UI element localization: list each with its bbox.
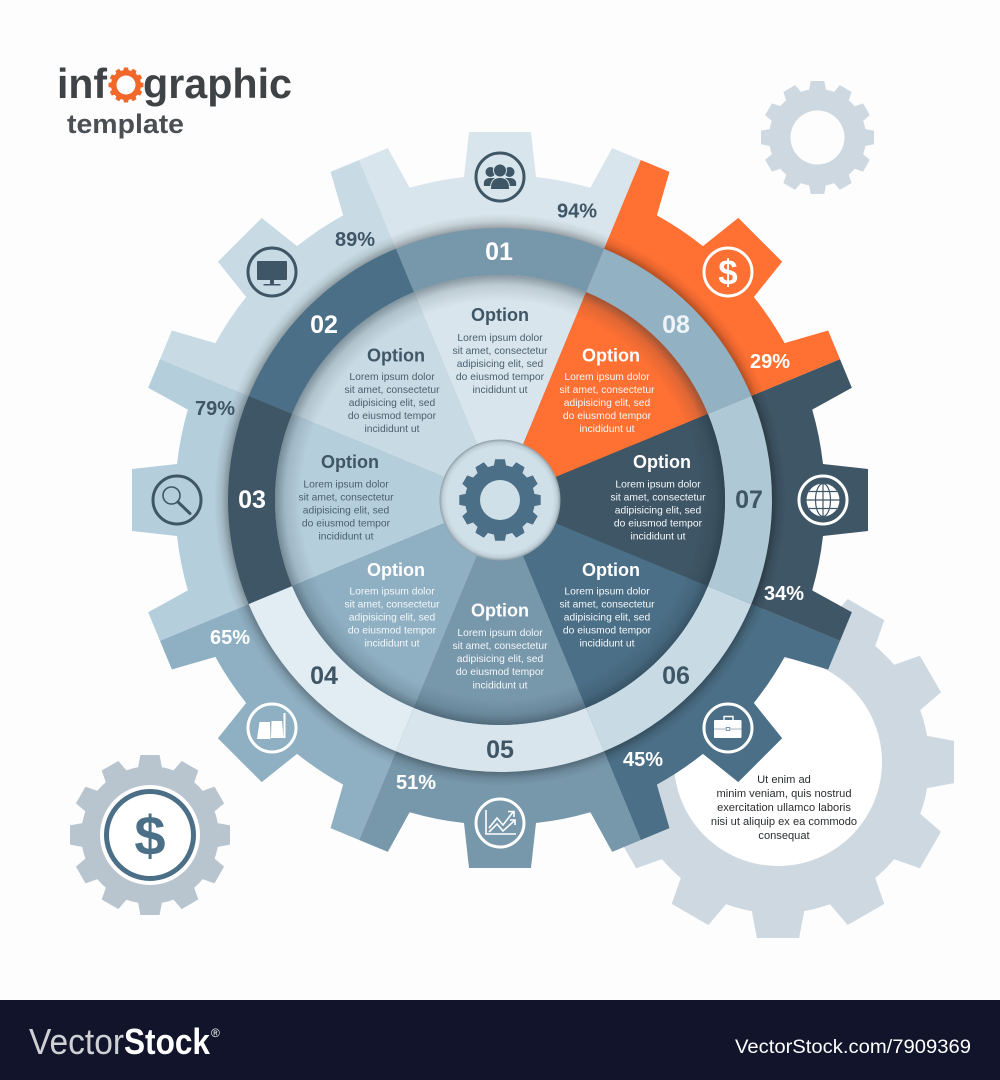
band 07 [708,396,772,604]
text block: option 05 [452,600,548,692]
text block: option 04: do eiusmod tempor [348,626,437,636]
text block: option 07: Option [633,452,691,472]
footer logo: VectorStock: Stock [124,1021,211,1062]
band 02 [234,234,427,427]
outer segment 05 [359,500,641,868]
text block: option 06: adipisicing elit, sed [564,612,650,624]
text block: option 07: incididunt ut [631,532,686,542]
text block: option 08: Lorem ipsum dolor [564,372,650,383]
icon: cooling towers [248,704,296,752]
text block: option 06: incididunt ut [580,638,635,650]
text block: option 04 [344,560,440,650]
text block: option 05: incididunt ut [473,680,528,692]
text block: option 05: Lorem ipsum dolor [457,628,543,639]
center hub with gear icon [440,440,560,560]
text block: option 01: adipisicing elit, sed [457,359,543,370]
text block: option 01: Option [471,305,529,325]
text block: option 02: Lorem ipsum dolor [349,372,435,383]
number 02: 02 [310,311,338,339]
band 08 [573,234,766,427]
text block: option 04: Option [367,560,425,580]
ring shadow on the outer gear [214,214,786,786]
band 04 [234,573,427,766]
wedge 04 [280,439,561,720]
number 07: 07 [735,486,763,514]
text block: option 04: adipisicing elit, sed [349,612,435,624]
icon: dollar coin: $ [718,254,738,292]
text block: option 03: sit amet, consectetur [298,492,394,504]
wedge 06 [439,439,720,720]
text block: option 04: incididunt ut [365,638,420,650]
wedge 01 [414,275,586,500]
text block: option 03: Lorem ipsum dolor [303,480,389,490]
footer url: VectorStock.com/7909369 [735,1036,971,1058]
text block: option 05: do eiusmod tempor [456,667,545,678]
icon: people [476,153,524,201]
text block: option 05: sit amet, consectetur [452,641,548,652]
text block: option 03 [298,452,394,542]
text block: option 03: do eiusmod tempor [302,518,391,530]
percent 34: 34% [764,583,804,605]
outer segment 03 [132,359,500,641]
number 01: 01 [485,238,513,266]
outer segment 01 [359,132,641,500]
ring numbers [238,238,763,764]
logo icon: orange gear [108,68,144,102]
text block: option 07: Lorem ipsum dolor [615,480,701,490]
number 08: 08 [662,311,690,339]
footer logo: VectorStock: ® [211,1026,220,1040]
outer segment 07 [500,359,868,641]
wedge 08 orange [439,280,720,561]
text block: option 05: Option [471,600,529,620]
footer logo: VectorStock [29,1021,220,1062]
percent 89: 89% [335,229,375,251]
text block: option 02: Option [367,346,425,366]
callout text in large gear: exercitation ullamco laboris [717,802,851,814]
wedge 03 [275,414,500,586]
logo: infographic template [57,60,292,139]
text block: option 03: adipisicing elit, sed [303,506,389,516]
numbered ring bands [228,228,772,772]
inner pie wedges [275,275,725,725]
outer segment 04 [140,400,600,860]
dollar gear: bottom left: $ [134,804,166,867]
number 05: 05 [486,736,514,764]
percent 29: 29% [750,351,790,373]
text block: option 07: adipisicing elit, sed [615,506,701,516]
wedge 02 [280,280,561,561]
text block: option 02: do eiusmod tempor [348,411,437,422]
text block: option 04: Lorem ipsum dolor [349,586,435,598]
text block: option 08 [560,346,655,435]
logo word: inf: inf [57,60,108,107]
icon: magnifier [153,476,201,524]
text block: option 06: Lorem ipsum dolor [564,586,650,598]
icon: dollar coin [704,248,752,296]
decorative gear: top right [761,81,874,194]
text block: option 07 [610,452,706,542]
logo subtitle: template: template [67,109,184,139]
text block: option 08: Option [582,346,640,366]
text block: option 08: incididunt ut [580,424,635,435]
wedge 05 [414,500,586,725]
text block: option 01: sit amet, consectetur [452,346,548,357]
percent 79: 79% [195,398,235,420]
text block: option 01 [452,305,548,396]
text block: option 03: Option [321,452,379,472]
text block: option 06: Option [582,560,640,580]
text block: option 02: incididunt ut [365,424,420,435]
percent 51: 51% [396,772,436,794]
callout text in large gear [711,774,857,842]
text block: option 03: incididunt ut [319,532,374,542]
text block: option 07: do eiusmod tempor [614,518,703,530]
callout text in large gear: minim veniam, quis nostrud [716,788,852,800]
text block: option 04: sit amet, consectetur [344,600,440,610]
callout text in large gear: consequat [758,830,810,842]
outer segment 02 [140,140,600,600]
text block: option 01: do eiusmod tempor [456,372,545,383]
wedge 07 [500,414,725,586]
percent 94: 94% [557,200,597,222]
number 04: 04 [310,662,338,690]
callout text in large gear: Ut enim ad [757,774,811,786]
text block: option 02: adipisicing elit, sed [349,398,435,409]
footer logo: VectorStock: Vector [29,1021,124,1062]
dollar gear: bottom left [70,755,230,915]
text block: option 08: sit amet, consectetur [560,385,655,396]
percentages [195,200,804,794]
percent 65: 65% [210,627,250,649]
icon: globe [799,476,847,524]
text block: option 01: Lorem ipsum dolor [457,333,543,344]
outer segment 08 orange [400,140,860,600]
band 06 [573,573,766,766]
text block: option 01: incididunt ut [473,385,528,396]
main gear outer segments [132,132,868,868]
text block: option 06: do eiusmod tempor [563,626,652,636]
text block: option 06: sit amet, consectetur [560,600,655,610]
percent 45: 45% [623,749,663,771]
text block: option 05: adipisicing elit, sed [457,654,543,665]
band 03 [228,396,292,604]
text block: option 02 [344,346,440,435]
logo word: graphic: graphic [143,60,292,107]
icon: briefcase [704,704,752,752]
footer bar [0,1000,1000,1080]
callout text in large gear: nisi ut aliquip ex ea commodo [711,816,857,828]
text block: option 02: sit amet, consectetur [344,385,440,396]
text block: option 06 [560,560,655,650]
icon: monitor [248,248,296,296]
large background gear with text hole [602,586,954,938]
text block: option 08: adipisicing elit, sed [564,398,650,409]
inner disc edge shadow [275,275,725,725]
number 03: 03 [238,486,266,514]
icon: growth chart [476,799,524,847]
band 01 [396,228,604,292]
band 05 [396,708,604,772]
text block: option 07: sit amet, consectetur [610,492,706,504]
number 06: 06 [662,662,690,690]
outer segment 06 [400,400,860,860]
text block: option 08: do eiusmod tempor [563,411,652,422]
